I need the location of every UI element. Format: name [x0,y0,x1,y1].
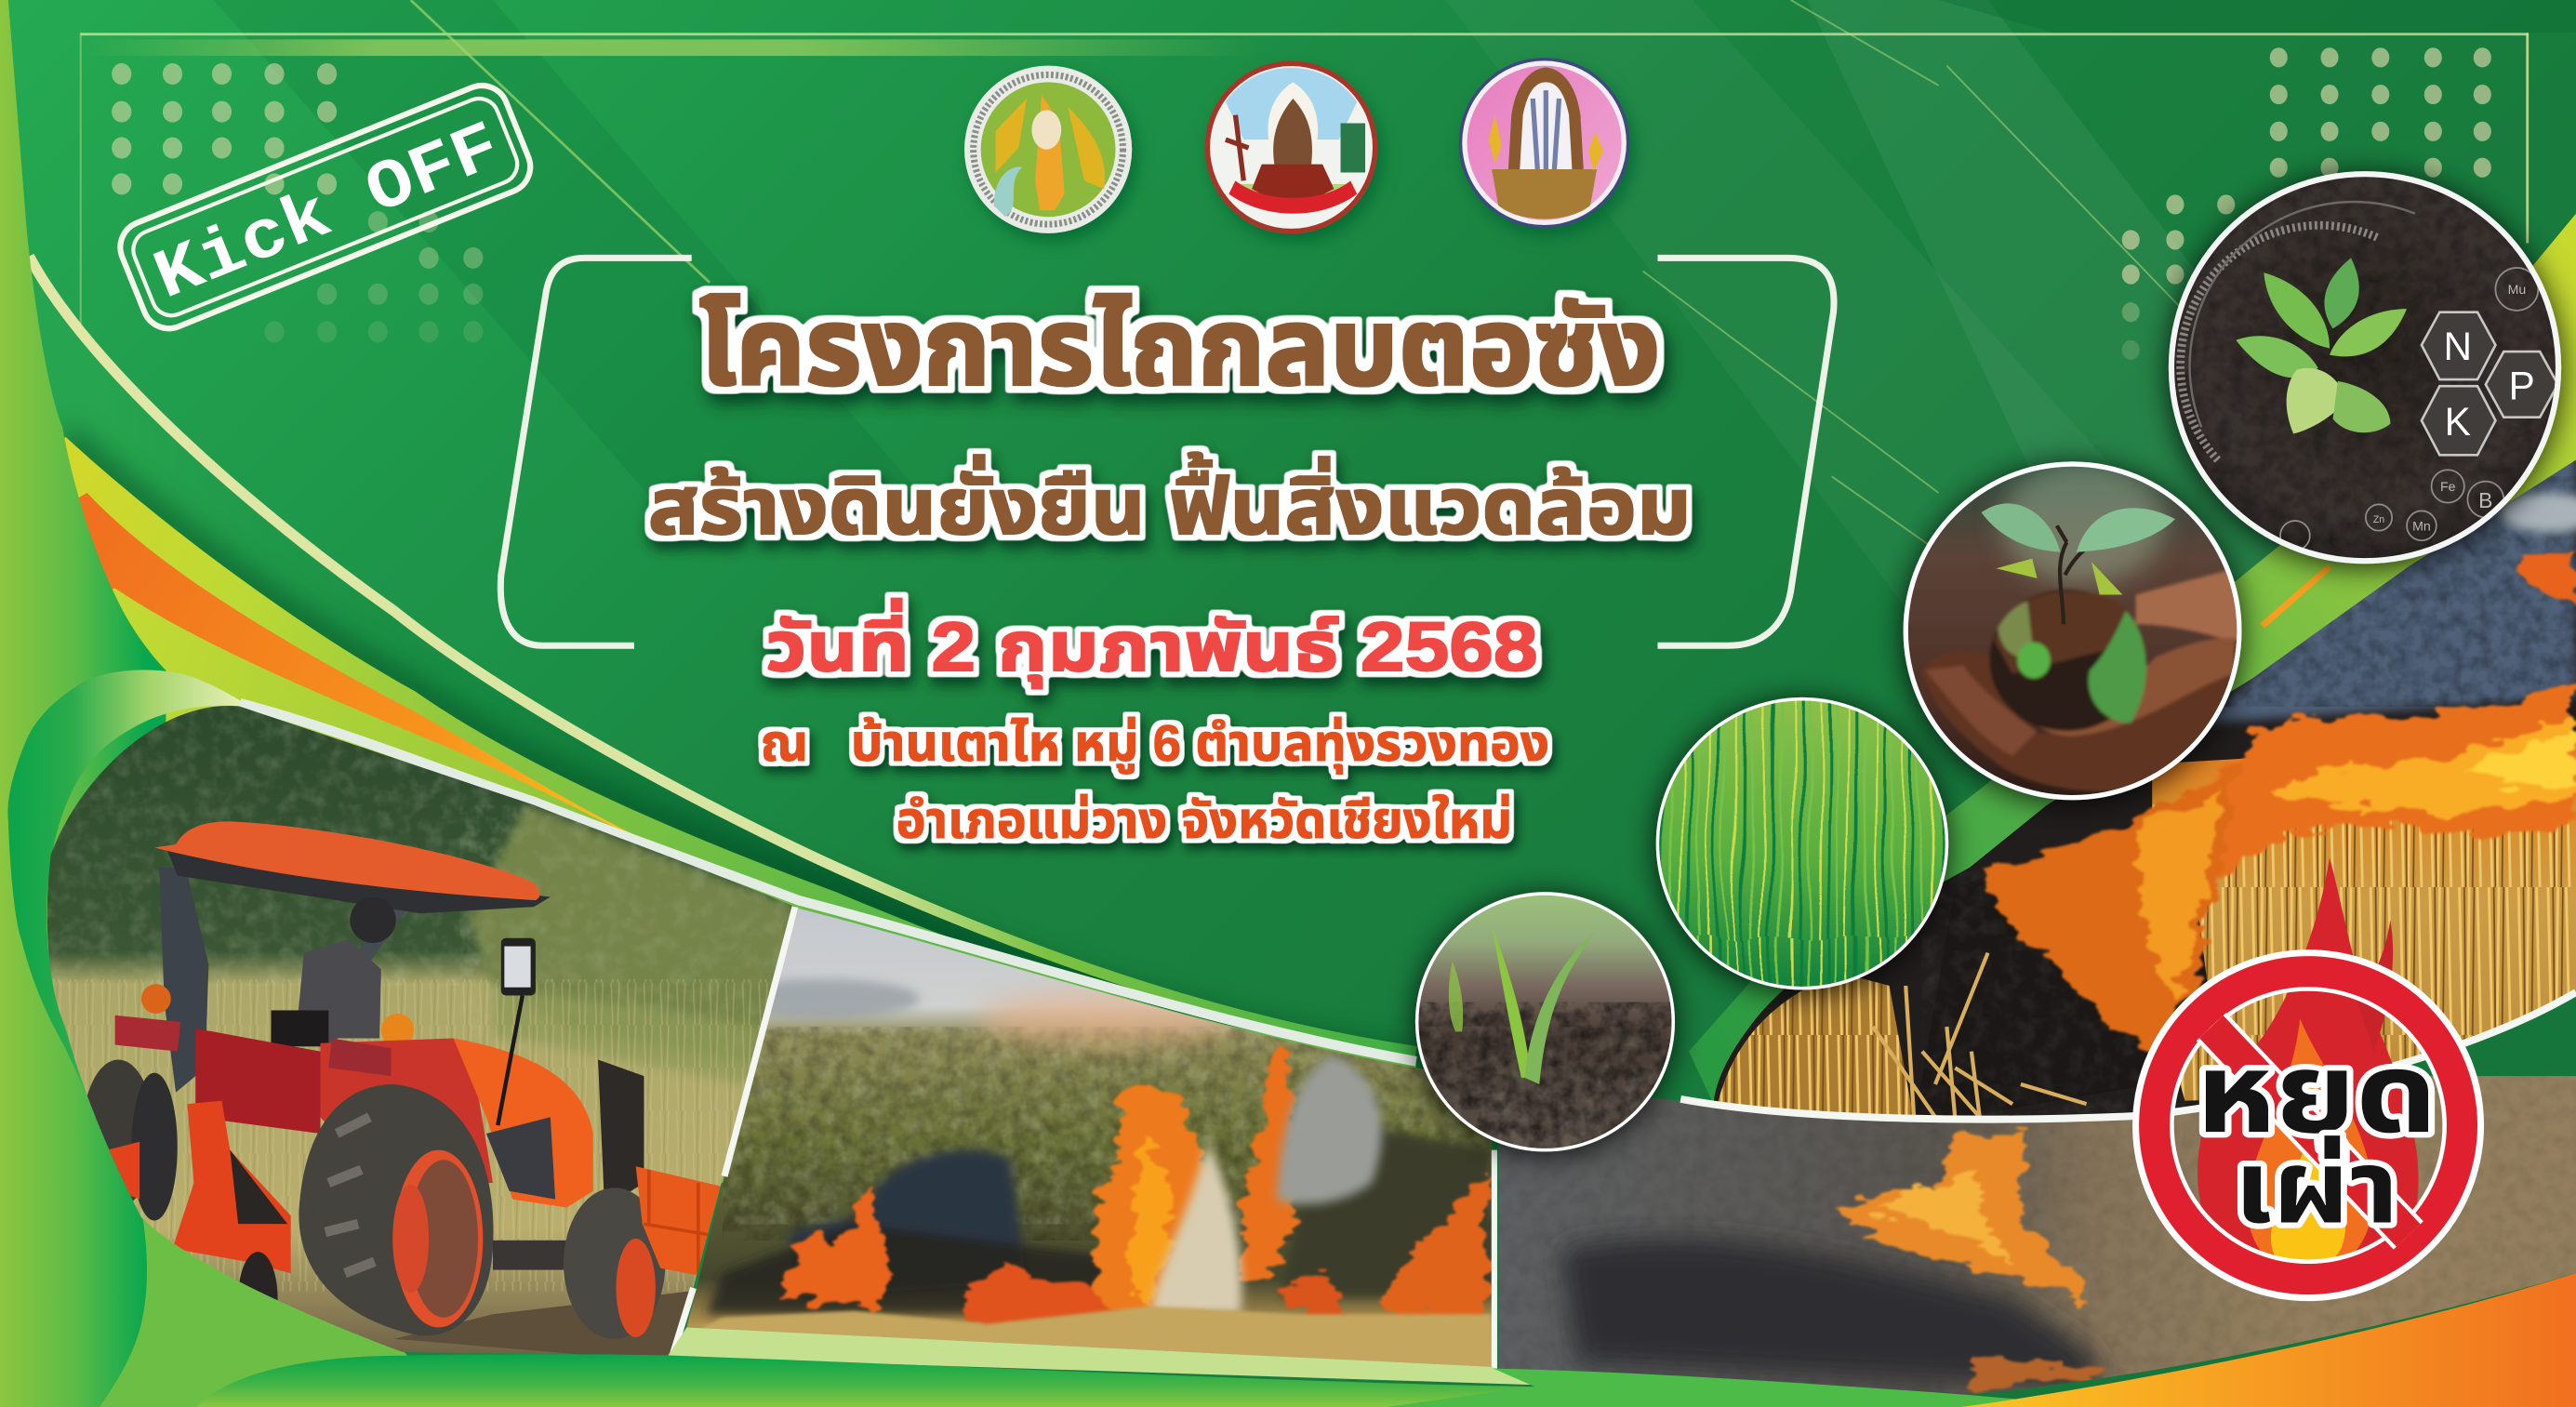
venue line 2: อำเภอแม่วาง จังหวัดเชียงใหม่ [896,791,1512,849]
venue line 1: ณ บ้านเตาไห หมู่ 6 ตำบลทุ่งรวงทอง [761,714,1549,775]
dark smoke [707,1117,1492,1314]
stamp: Kick OFF: Kick OFF [144,109,511,318]
left lower wedge [66,1052,460,1407]
circle photo: soil nutrient NPK: N [2444,325,2472,368]
circle photo: soil nutrient NPK: B [2478,488,2492,512]
photo: burning rice field [673,904,1495,1372]
green wedge under smoulder photo [1380,1369,2119,1407]
title: project name: โครงการไถกลบตอซัง [699,285,1660,407]
circle photo: soil nutrient NPK: Mn [2412,519,2431,534]
left green panel [0,0,166,1407]
sign text [2196,1031,2437,1244]
pale smoke [1150,1055,1382,1314]
circle photo: soil nutrient NPK: Mu [2508,282,2526,297]
smoke [2201,444,2576,723]
orange accent stripe [2263,566,2330,626]
diagonal lime band [1689,214,2576,1104]
bottom green band [195,1354,1534,1407]
pale strip under field photo [667,1327,1534,1385]
flames [782,1040,1489,1331]
circle photo: soil nutrient NPK: P [2509,364,2535,407]
sweeping colour bands [0,257,1416,1183]
NPK hexagons [2422,312,2558,455]
logo: right seal [1459,58,1629,229]
circle photo: seedling in soil [1413,887,1684,1158]
flames [1983,542,2576,1052]
dot pattern top right [2122,47,2491,360]
photo: burning straw [1708,444,2576,1134]
title: subtitle: สร้างดินยั่งยืน ฟื้นสิ่งแวดล้อม [648,452,1692,551]
prohibition ring [2136,954,2480,1297]
circle photo: soil nutrient NPK: Fe [2440,479,2456,494]
flame icon [2198,857,2419,1290]
green swirl [7,670,250,1134]
date: วันที่ 2 กุมภาพันธ์ 2568 [765,598,1538,689]
circle photo: soil nutrient NPK: K [2445,400,2471,444]
sign text: หยุด [2196,1031,2437,1161]
circle photo: soil nutrient NPK: Zn [2373,514,2384,525]
circle photo: soil nutrient NPK [2169,171,2563,565]
circle photo: rice plants [1643,682,1963,994]
loose straw heap [1717,973,1914,1121]
straw [2152,739,2576,1101]
photo divider lines [672,907,2576,1369]
burnt ground [1914,805,2210,1125]
photo: white edge [240,703,1416,1061]
title bracket: right [1657,258,1834,645]
sign text: เผ่า [2235,1131,2398,1244]
no burning sign [2136,857,2480,1297]
stamp: Kick OFF [113,78,538,337]
logo: left seal [964,66,1132,233]
ground flames [1832,1129,2111,1388]
dot pattern top left [112,63,483,342]
circle photo: hands holding seedling [1897,460,2251,805]
photo: smouldering ground [1487,1076,2576,1404]
title bracket: left [500,258,692,645]
photo: tractor in field [33,698,821,1363]
seedling leaves [2236,258,2407,433]
logo: centre seal [1205,61,1377,233]
orange corner swoosh [1955,1273,2576,1407]
tractor [82,821,777,1344]
